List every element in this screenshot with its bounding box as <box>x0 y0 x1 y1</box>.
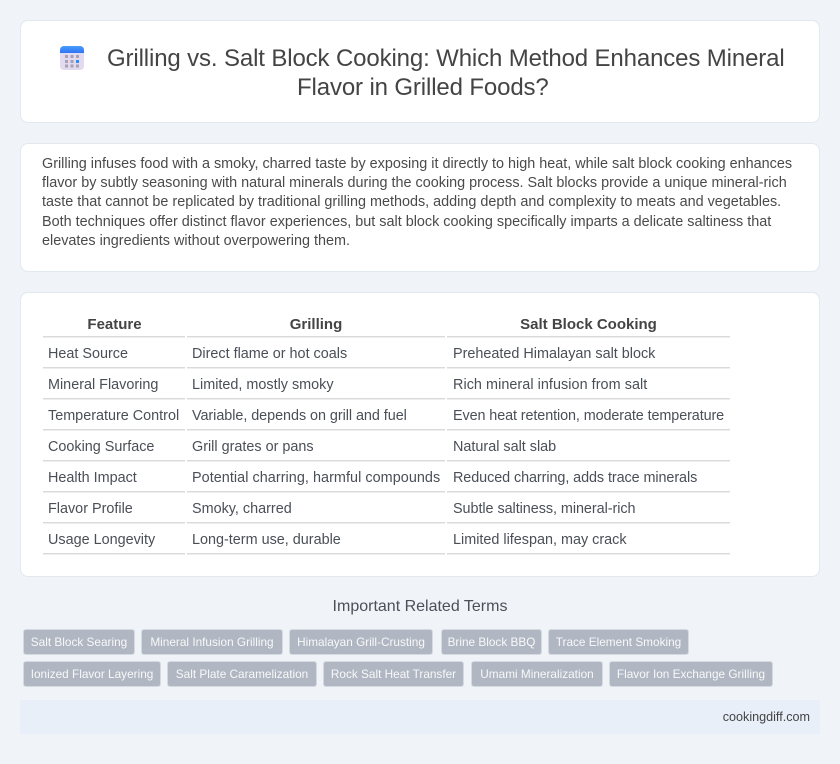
icon: calendar <box>60 46 84 70</box>
related terms tags: Ionized Flavor Layering <box>31 667 153 681</box>
comparison table: Grilling <box>290 316 342 333</box>
panel: comparison table card <box>20 292 820 577</box>
comparison table: Potential charring, harmful compounds <box>192 470 440 486</box>
comparison table: Salt Block Cooking <box>520 316 657 333</box>
comparison table: Temperature Control <box>48 408 179 424</box>
header card <box>20 20 820 123</box>
intro paragraph: Both techniques offer distinct flavor experiences, but salt block cooking specifically imparts a delicate saltiness that <box>42 214 771 230</box>
intro paragraph <box>42 156 792 249</box>
comparison table: Reduced charring, adds trace minerals <box>453 470 697 486</box>
related terms tags: Himalayan Grill-Crusting <box>297 635 425 649</box>
panel: intro text card <box>20 143 820 272</box>
comparison table: Flavor Profile <box>48 501 133 517</box>
related terms heading: Important Related Terms <box>333 598 507 615</box>
intro paragraph: Grilling infuses food with a smoky, charred taste by exposing it directly to high heat, while salt block cooking enhances <box>42 156 792 172</box>
intro paragraph: flavor by subtly seasoning with natural minerals during the cooking process. Salt blocks provide a unique mineral-rich <box>42 175 787 191</box>
comparison table: Long-term use, durable <box>192 532 341 548</box>
footer credit: cookingdiff.com <box>723 710 810 724</box>
related terms tags: Salt Block Searing <box>31 635 127 649</box>
footer bar <box>20 700 820 734</box>
related terms tags: Flavor Ion Exchange Grilling <box>617 667 765 681</box>
related terms tags: Umami Mineralization <box>480 667 594 681</box>
title: Flavor in Grilled Foods? <box>297 74 549 101</box>
comparison table: Rich mineral infusion from salt <box>453 377 647 393</box>
comparison table: Cooking Surface <box>48 439 154 455</box>
related terms tags: Brine Block BBQ <box>448 635 535 649</box>
comparison table: Limited, mostly smoky <box>192 377 334 393</box>
comparison table: Usage Longevity <box>48 532 155 548</box>
intro paragraph: taste that cannot be replicated by traditional grilling methods, adding depth and complexity to meats and vegetables. <box>42 194 781 210</box>
comparison table: Smoky, charred <box>192 501 292 517</box>
comparison table: Preheated Himalayan salt block <box>453 346 655 362</box>
title: Grilling vs. Salt Block Cooking: Which Method Enhances Mineral <box>107 45 785 72</box>
comparison table: Mineral Flavoring <box>48 377 158 393</box>
related terms tags: Mineral Infusion Grilling <box>150 635 274 649</box>
related terms tags: Trace Element Smoking <box>556 635 681 649</box>
title <box>107 45 785 101</box>
related terms tags <box>23 629 773 687</box>
related terms tags: Salt Plate Caramelization <box>176 667 308 681</box>
comparison table: Subtle saltiness, mineral-rich <box>453 501 635 517</box>
comparison table: Variable, depends on grill and fuel <box>192 408 407 424</box>
intro paragraph: elevates ingredients without overpowering them. <box>42 233 350 249</box>
comparison table: Natural salt slab <box>453 439 556 455</box>
comparison table: Grill grates or pans <box>192 439 314 455</box>
comparison table: Heat Source <box>48 346 128 362</box>
related terms tags: Rock Salt Heat Transfer <box>331 667 456 681</box>
comparison table: Direct flame or hot coals <box>192 346 347 362</box>
comparison table: Health Impact <box>48 470 137 486</box>
comparison table: Limited lifespan, may crack <box>453 532 627 548</box>
comparison table: Even heat retention, moderate temperature <box>453 408 724 424</box>
comparison table <box>43 316 730 555</box>
comparison table: Feature <box>87 316 142 333</box>
